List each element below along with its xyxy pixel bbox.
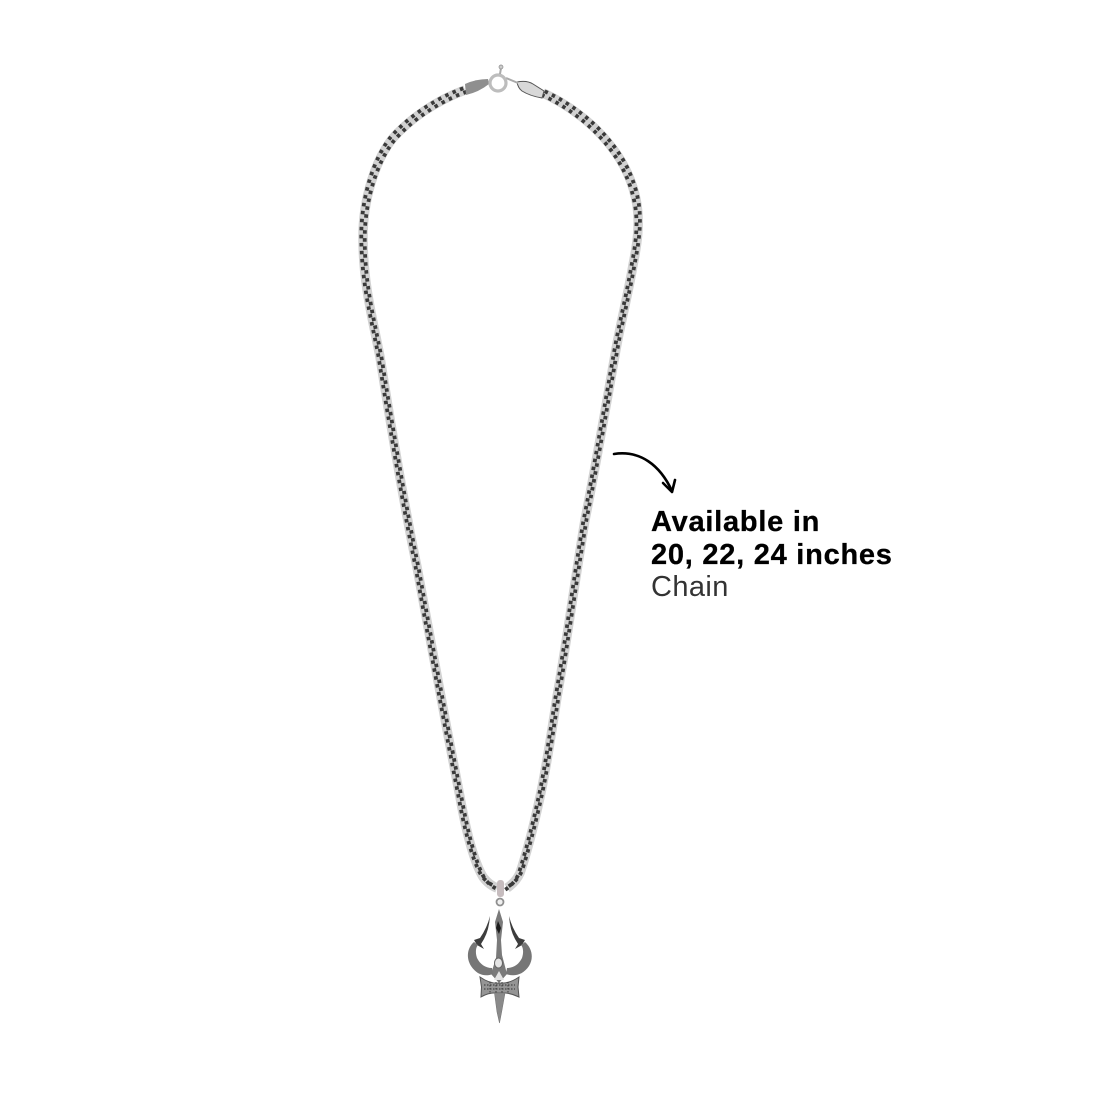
lower blade (494, 993, 505, 1023)
bail (497, 880, 504, 897)
heading (651, 506, 893, 571)
callout text (651, 506, 893, 603)
arrow (614, 453, 675, 492)
drum (480, 977, 519, 997)
heading: 20, 22, 24 inches (651, 539, 893, 571)
label: Chain (651, 571, 729, 603)
left prong (474, 916, 490, 949)
trident center prong (491, 909, 507, 983)
necklace chain (361, 88, 640, 890)
right prong (509, 916, 525, 949)
clasp (465, 65, 544, 98)
trident pendant (468, 880, 532, 1023)
heading: Available in (651, 506, 820, 538)
